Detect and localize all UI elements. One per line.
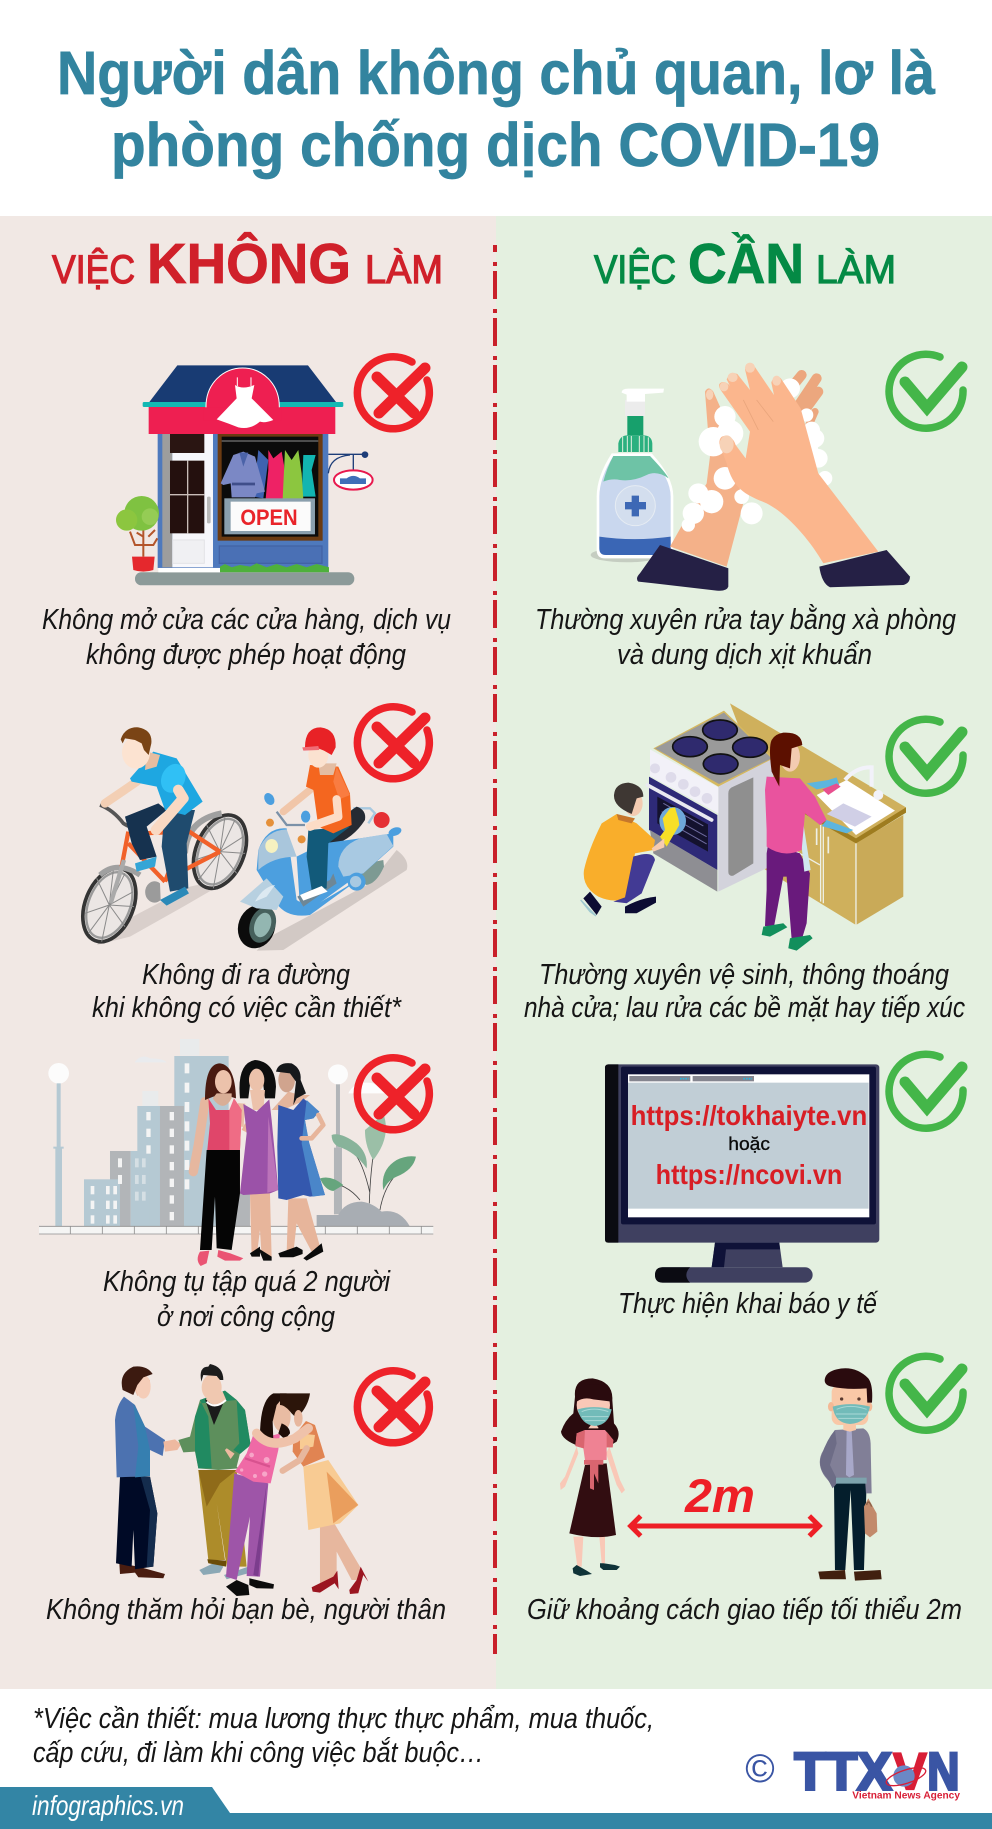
- link: ncovi: https://ncovi.vn: [656, 1159, 842, 1190]
- logo: TTXVN Vietnam News Agency: ©: [745, 1747, 775, 1791]
- arrow: 2m distance: [631, 1516, 819, 1536]
- icon: check 4: [889, 1356, 963, 1430]
- icon: check 2: [889, 719, 963, 793]
- caption: không đi ra đường: Không đi ra đường: [142, 959, 350, 991]
- illustration: city street and group of women: [39, 1039, 433, 1266]
- caption: không tụ tập: ở nơi công cộng: [157, 1301, 335, 1333]
- logo: TTXVN Vietnam News Agency: V: [893, 1742, 927, 1801]
- caption: khai báo y tế: Thực hiện khai báo y tế: [618, 1288, 879, 1320]
- footer source label: infographics.vn: [32, 1790, 184, 1821]
- heading: việc không làm: [52, 231, 443, 296]
- logo: TTXVN Vietnam News Agency: N: [927, 1742, 959, 1801]
- illustration: computer monitor with health declaration links: [605, 1064, 879, 1283]
- text: hoặc: hoặc: [728, 1133, 770, 1154]
- caption: không mở cửa: không được phép hoạt động: [86, 639, 406, 671]
- footnote: cấp cứu, đi làm khi công việc bắt buộc…: [33, 1736, 484, 1769]
- heading: việc không làm: LÀM: [365, 247, 443, 292]
- title: phòng chống dịch COVID-19: [111, 111, 880, 179]
- label: 2m: 2m: [684, 1470, 755, 1523]
- icon: check 3: [889, 1054, 963, 1128]
- caption: không đi ra đường: [92, 959, 402, 1024]
- title: [57, 39, 936, 179]
- heading: việc cần làm: LÀM: [816, 247, 896, 292]
- illustration: open shop: OPEN: [240, 505, 298, 530]
- footnote: *Việc cần thiết: mua lương thực thực phẩm, mua thuốc,: [33, 1703, 654, 1735]
- illustration: keeping 2m distance with masks: [560, 1368, 882, 1581]
- logo: TTXVN Vietnam News Agency: [745, 1742, 960, 1802]
- logo: TTXVN Vietnam News Agency: TTX: [794, 1742, 892, 1801]
- link: tokhaiyte: https://tokhaiyte.vn: [631, 1100, 867, 1131]
- caption: rửa tay: và dung dịch xịt khuẩn: [617, 639, 872, 671]
- person: man in mask: [818, 1368, 882, 1581]
- caption: không mở cửa: Không mở cửa các cửa hàng, dịch vụ: [42, 604, 451, 636]
- icon: cross 2: [357, 707, 429, 779]
- footnote: [33, 1703, 654, 1769]
- logo: TTXVN Vietnam News Agency: Vietnam News Agency: [852, 1791, 960, 1802]
- caption: không tụ tập: [103, 1266, 391, 1333]
- caption: rửa tay: [535, 603, 956, 671]
- illustration: people greeting and hugging: [115, 1364, 368, 1596]
- heading: việc không làm: VIỆC: [52, 247, 135, 292]
- caption: vệ sinh nhà cửa: [524, 959, 965, 1024]
- person: woman in mask: [560, 1378, 625, 1576]
- title: Người dân không chủ quan, lơ là: [57, 39, 936, 107]
- caption: không tụ tập: Không tụ tập quá 2 người: [103, 1266, 391, 1298]
- icon: cross 1: [357, 357, 429, 429]
- caption: không thăm hỏi: Không thăm hỏi bạn bè, người thân: [46, 1594, 446, 1626]
- heading: việc cần làm: CẦN: [688, 231, 804, 296]
- heading: việc cần làm: VIỆC: [594, 247, 676, 292]
- heading: việc không làm: KHÔNG: [147, 231, 351, 296]
- icon: cross 4: [357, 1371, 429, 1443]
- illustration: open shop: [116, 365, 373, 585]
- illustration: cyclist and scooter rider: [73, 727, 407, 954]
- panel: việc không làm background: [0, 216, 496, 1689]
- illustration: hand washing and sanitizer bottle: [591, 363, 910, 591]
- icon: check 1: [889, 354, 963, 428]
- illustration: cleaning the kitchen: [581, 703, 906, 951]
- footer band: [0, 1787, 992, 1829]
- panel: việc cần làm background: [496, 216, 992, 1689]
- heading: việc cần làm: [594, 231, 896, 296]
- icon: cross 3: [357, 1058, 429, 1130]
- caption: không mở cửa: [42, 604, 451, 671]
- caption: không đi ra đường: khi không có việc cần thiết*: [92, 992, 402, 1024]
